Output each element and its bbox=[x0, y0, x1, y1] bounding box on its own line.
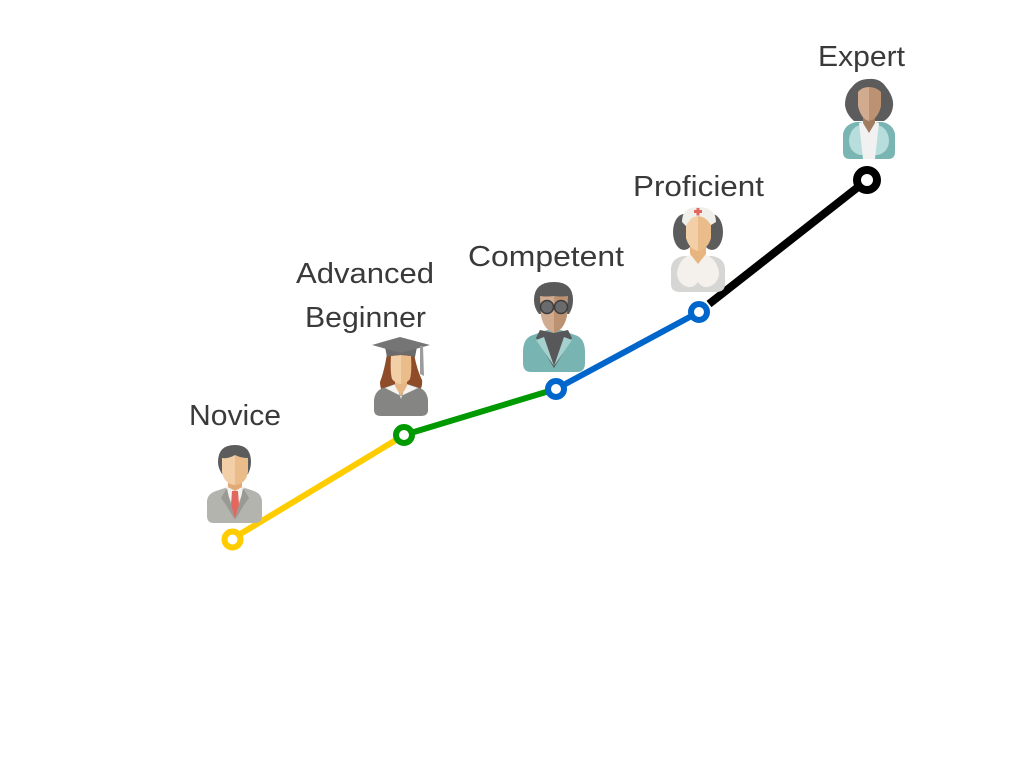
label: Advanced Beginner: Advanced bbox=[296, 258, 434, 290]
node: expert bbox=[857, 170, 877, 190]
icon: advanced beginner graduate bbox=[372, 337, 430, 416]
label: Novice: Novice bbox=[189, 400, 281, 432]
line segment: advanced beginner to competent bbox=[404, 389, 556, 435]
label: Advanced Beginner: Beginner bbox=[305, 302, 426, 334]
node: proficient bbox=[691, 304, 707, 320]
label: Competent: Competent bbox=[468, 241, 624, 273]
node: competent bbox=[548, 381, 564, 397]
line segment: proficient to expert bbox=[709, 180, 867, 304]
icon: competent man with glasses bbox=[523, 282, 585, 372]
node: advanced beginner bbox=[396, 427, 412, 443]
line segment: competent to proficient bbox=[556, 312, 699, 389]
icon: expert woman bbox=[843, 79, 895, 159]
label: Advanced Beginner bbox=[296, 258, 434, 334]
line segment: novice to advanced beginner bbox=[232, 440, 396, 539]
label: Proficient: Proficient bbox=[633, 171, 764, 203]
node: novice bbox=[224, 532, 240, 548]
icon: novice businessman bbox=[207, 445, 262, 523]
label: Expert: Expert bbox=[818, 41, 905, 73]
icon: proficient nurse bbox=[671, 207, 725, 292]
